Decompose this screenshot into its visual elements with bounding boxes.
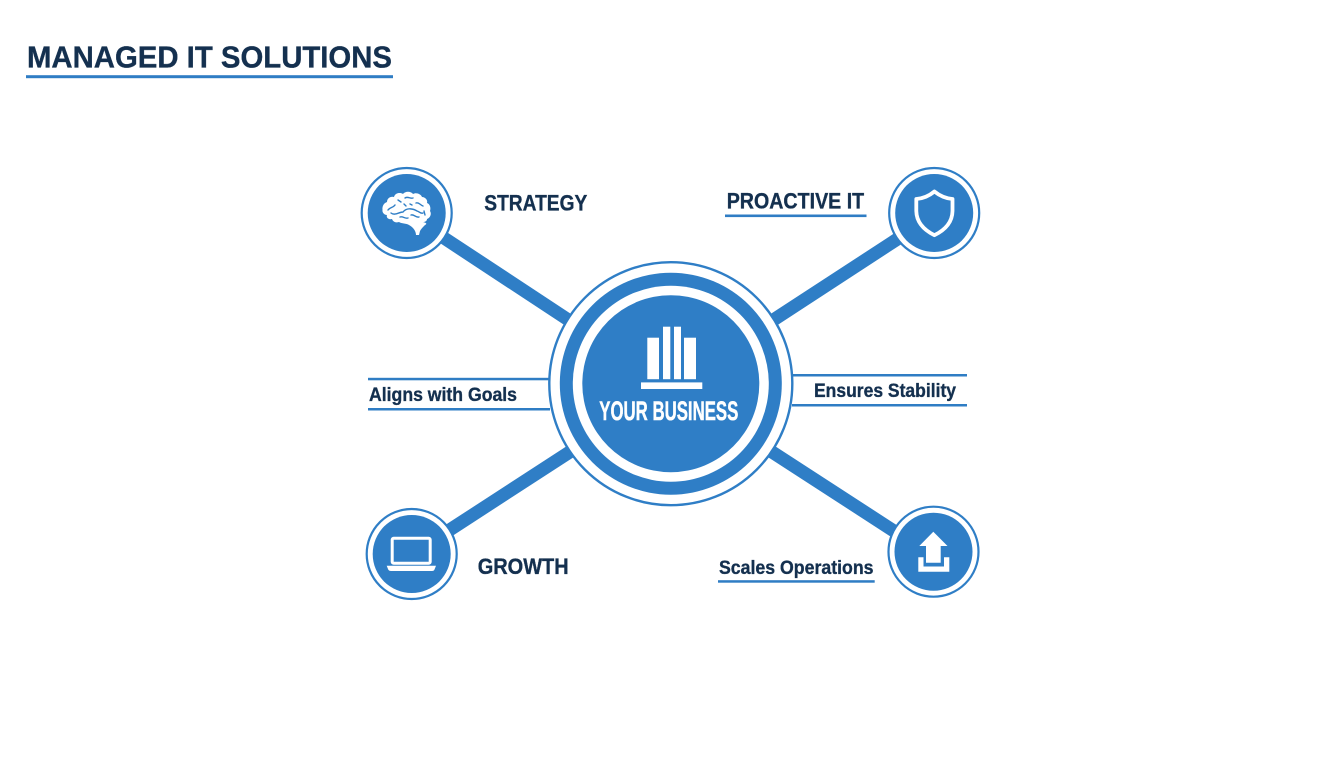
icon: building bars xyxy=(641,327,702,389)
label: Aligns with Goals: Aligns with Goals xyxy=(369,384,517,406)
node: growth xyxy=(367,509,457,599)
label: Ensures Stability: Ensures Stability xyxy=(814,380,956,402)
node: scales operations xyxy=(888,507,978,597)
heading: scales operations: Scales Operations xyxy=(719,557,874,579)
connectors: hub to four nodes xyxy=(441,236,899,533)
icon: laptop xyxy=(387,538,436,571)
heading: proactive IT: PROACTIVE IT xyxy=(727,188,865,213)
title: MANAGED IT SOLUTIONS xyxy=(27,40,392,75)
heading: strategy: STRATEGY xyxy=(484,190,588,216)
central hub: your business xyxy=(549,262,792,505)
icon: brain xyxy=(382,192,431,235)
icon: upload arrow xyxy=(918,532,949,572)
heading: growth: GROWTH xyxy=(478,554,569,579)
node: proactive IT xyxy=(889,168,979,258)
icon: shield xyxy=(916,192,952,235)
node: strategy xyxy=(362,168,452,258)
hub label: YOUR BUSINESS xyxy=(599,396,738,426)
